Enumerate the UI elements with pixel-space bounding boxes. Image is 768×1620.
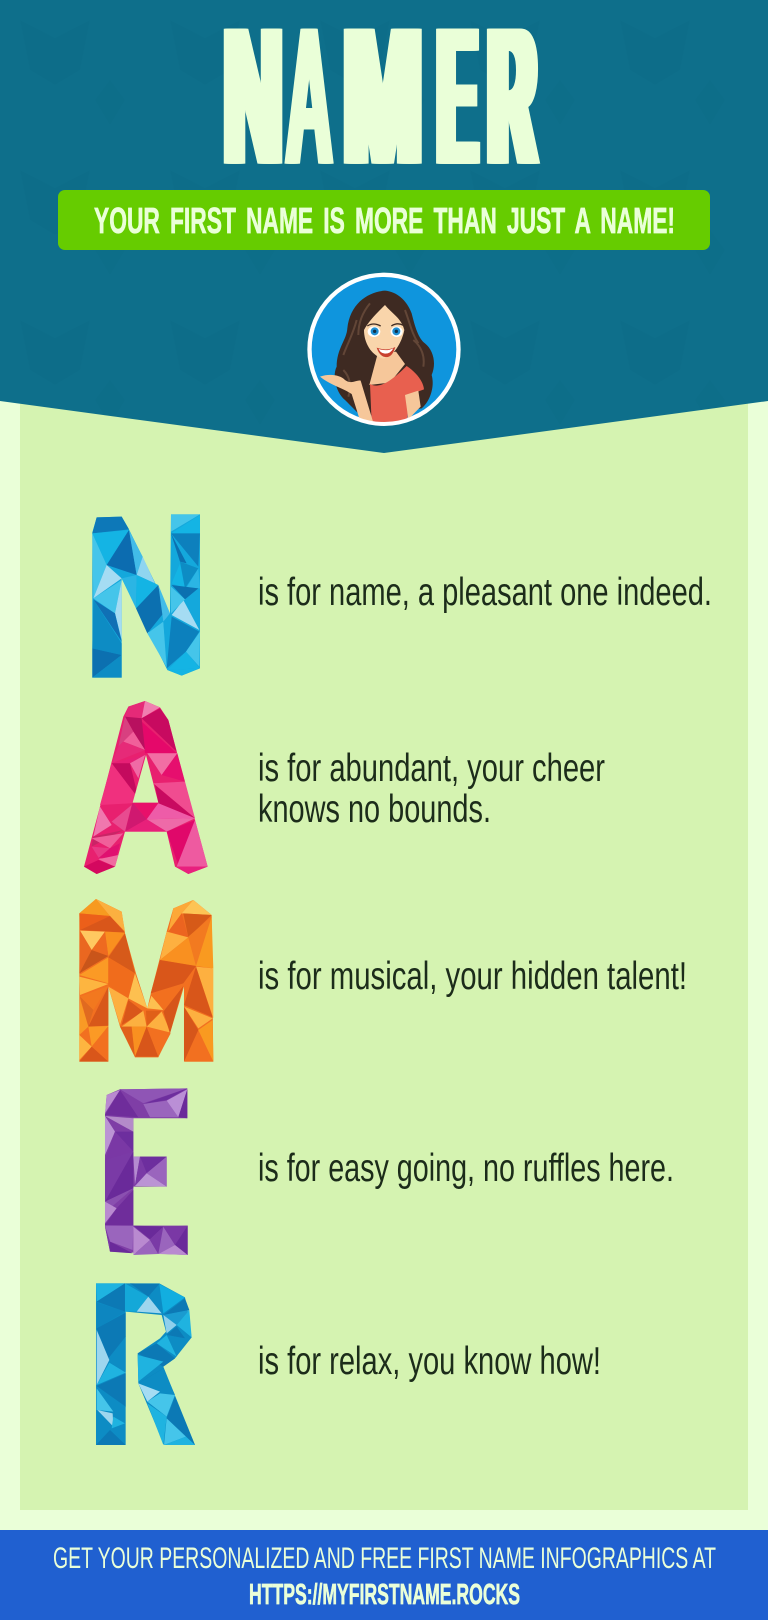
text: A lines: knows no bounds. [258, 788, 491, 831]
letter M [79, 899, 213, 1062]
text: A lines [258, 747, 605, 831]
letter E [105, 1088, 188, 1255]
footer url: HTTPS://MYFIRSTNAME.ROCKS [249, 1579, 520, 1611]
icon: avatar of smiling woman in a circle [307, 273, 461, 426]
panel: light green content area [20, 400, 748, 1510]
banner: green subtitle bar [58, 190, 710, 250]
letter A [84, 701, 208, 874]
letter N [92, 514, 200, 678]
text: A lines: is for abundant, your cheer [258, 747, 605, 790]
text: R line: is for relax, you know how! [258, 1340, 601, 1383]
panel: teal header chevron [0, 0, 768, 453]
letter R [96, 1283, 195, 1445]
title [224, 0, 540, 207]
footer band [0, 1530, 768, 1620]
